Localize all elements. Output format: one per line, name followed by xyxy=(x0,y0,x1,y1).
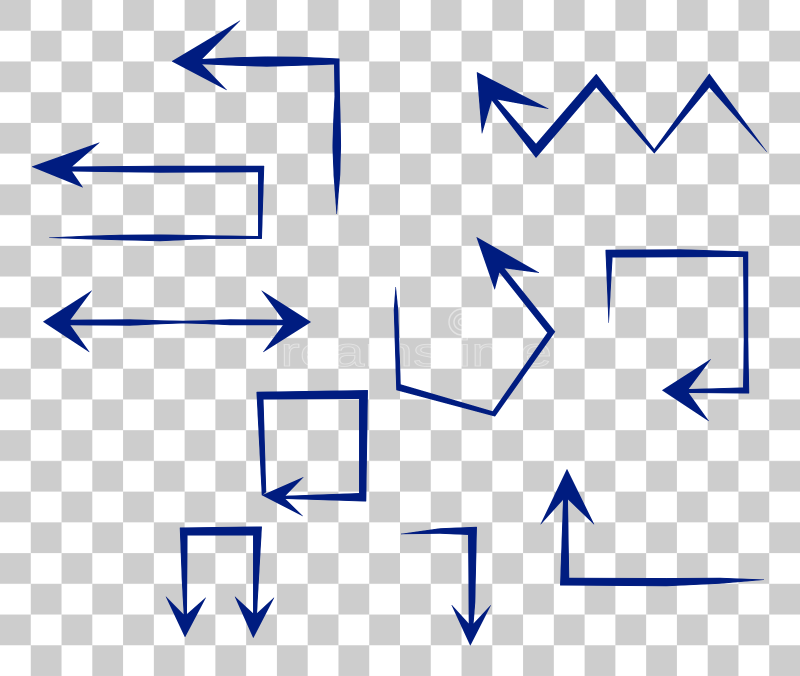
watermark xyxy=(248,309,552,375)
arrow: L-shaped pointing up xyxy=(541,469,764,586)
arrow: bent pointing down xyxy=(401,527,491,645)
arrow: small square pointing left xyxy=(257,390,368,516)
arrow: double downward fork xyxy=(166,527,274,638)
arrow: zigzag pointing up-left xyxy=(477,72,767,158)
arrow: double-headed horizontal xyxy=(43,291,311,352)
watermark: dreamstime xyxy=(248,329,552,375)
arrow: open square pointing left, right side xyxy=(606,250,749,421)
arrow: folded rectangle pointing left xyxy=(32,143,264,241)
arrow: pentagon path pointing up-left xyxy=(394,237,555,416)
arrow: L-shaped pointing left, top xyxy=(172,21,341,214)
